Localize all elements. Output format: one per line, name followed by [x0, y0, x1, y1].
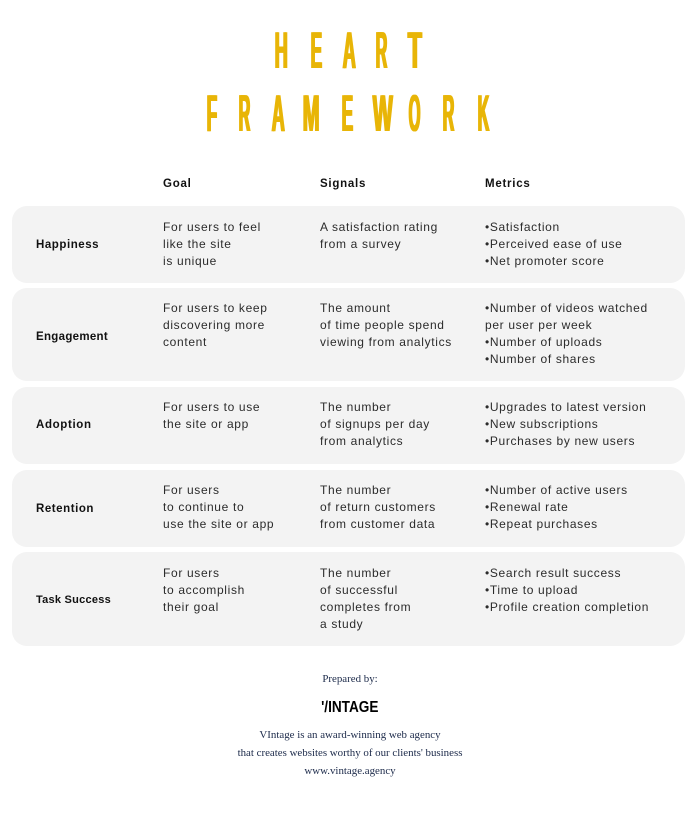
title: FRAMEWORK: R — [442, 85, 454, 143]
Engagement goal: content — [163, 335, 207, 349]
footer: agency description: that creates websites worthy of our clients' business — [238, 747, 462, 759]
Engagement goal — [163, 301, 268, 349]
title: HEART: A — [342, 22, 355, 80]
Task Success metrics: •Profile creation completion — [485, 600, 649, 614]
Engagement signals: The amount — [320, 301, 391, 315]
panel: Task Success row — [12, 552, 685, 646]
Task Success signals: The number — [320, 566, 391, 580]
Retention goal: For users — [163, 483, 220, 497]
footer: prepared by: Prepared by: — [322, 673, 378, 685]
Task Success signals: completes from — [320, 600, 411, 614]
Adoption goal — [163, 400, 260, 431]
panel: Happiness row — [12, 206, 685, 283]
Adoption metrics: •New subscriptions — [485, 417, 598, 431]
Task Success goal: their goal — [163, 600, 219, 614]
Happiness goal: like the site — [163, 237, 232, 251]
Happiness metrics: •Perceived ease of use — [485, 237, 622, 251]
Retention goal: to continue to — [163, 500, 244, 514]
panel: Retention row — [12, 470, 685, 547]
Task Success goal — [163, 566, 245, 614]
Task Success signals: a study — [320, 617, 363, 631]
Happiness goal — [163, 220, 261, 268]
Happiness signals: from a survey — [320, 237, 401, 251]
Retention metrics: •Number of active users — [485, 483, 628, 497]
Retention signals: from customer data — [320, 517, 435, 531]
title: FRAMEWORK: A — [271, 85, 284, 143]
Happiness metrics: •Satisfaction — [485, 220, 560, 234]
title: HEART: T — [407, 22, 421, 80]
panel: Adoption row — [12, 387, 685, 464]
title: FRAMEWORK: E — [341, 85, 352, 143]
Adoption metrics: •Upgrades to latest version — [485, 400, 646, 414]
row label: Engagement: Engagement — [36, 331, 108, 343]
Retention metrics: •Repeat purchases — [485, 517, 598, 531]
column heading: Metrics: Metrics — [485, 178, 531, 190]
Adoption goal: For users to use — [163, 400, 260, 414]
Engagement goal: discovering more — [163, 318, 265, 332]
Retention signals: of return customers — [320, 500, 436, 514]
Happiness metrics: •Net promoter score — [485, 254, 604, 268]
title: FRAMEWORK: K — [477, 85, 489, 143]
Adoption goal: the site or app — [163, 417, 249, 431]
column heading: Signals: Signals — [320, 178, 366, 190]
Happiness metrics — [485, 220, 622, 268]
footer: agency description: www.vintage.agency — [304, 765, 396, 777]
title: HEART — [274, 22, 422, 80]
Engagement signals — [320, 301, 452, 349]
title: HEART: E — [310, 22, 321, 80]
logo: VINTAGE: '/INTAGE — [321, 699, 379, 716]
Happiness signals — [320, 220, 438, 251]
row label: Retention: Retention — [36, 503, 94, 515]
title: HEART: R — [375, 22, 387, 80]
row label: Happiness: Happiness — [36, 239, 99, 251]
Task Success metrics — [485, 566, 649, 614]
Engagement metrics — [485, 301, 648, 366]
column heading: Goal: Goal — [163, 178, 192, 190]
title: FRAMEWORK: W — [372, 85, 392, 143]
Retention signals — [320, 483, 436, 531]
title: FRAMEWORK: R — [238, 85, 250, 143]
Engagement metrics: per user per week — [485, 318, 592, 332]
Engagement signals: of time people spend — [320, 318, 445, 332]
Adoption signals — [320, 400, 430, 448]
Retention signals: The number — [320, 483, 391, 497]
Happiness signals: A satisfaction rating — [320, 220, 438, 234]
Adoption metrics: •Purchases by new users — [485, 434, 635, 448]
panel: Engagement row — [12, 288, 685, 381]
Task Success goal: to accomplish — [163, 583, 245, 597]
Engagement metrics: •Number of shares — [485, 352, 596, 366]
footer: agency description — [238, 729, 462, 777]
title: FRAMEWORK: M — [302, 85, 319, 143]
title: FRAMEWORK: F — [206, 85, 216, 143]
Engagement signals: viewing from analytics — [320, 335, 452, 349]
title: HEART: H — [274, 22, 287, 80]
title: FRAMEWORK — [206, 85, 490, 143]
Happiness goal: For users to feel — [163, 220, 261, 234]
Task Success signals — [320, 566, 411, 631]
Task Success goal: For users — [163, 566, 220, 580]
Retention metrics: •Renewal rate — [485, 500, 568, 514]
Happiness goal: is unique — [163, 254, 217, 268]
Adoption signals: from analytics — [320, 434, 403, 448]
footer: agency description: VIntage is an award-winning web agency — [259, 729, 441, 741]
row label: Task Success: Task Success — [36, 594, 111, 606]
title: FRAMEWORK: O — [408, 85, 420, 143]
Task Success metrics: •Time to upload — [485, 583, 578, 597]
Retention metrics — [485, 483, 628, 531]
Engagement metrics: •Number of videos watched — [485, 301, 648, 315]
Task Success metrics: •Search result success — [485, 566, 621, 580]
Engagement goal: For users to keep — [163, 301, 268, 315]
Adoption metrics — [485, 400, 646, 448]
Retention goal — [163, 483, 274, 531]
Engagement metrics: •Number of uploads — [485, 335, 602, 349]
Task Success signals: of successful — [320, 583, 398, 597]
Retention goal: use the site or app — [163, 517, 274, 531]
Adoption signals: The number — [320, 400, 391, 414]
Adoption signals: of signups per day — [320, 417, 430, 431]
row label: Adoption: Adoption — [36, 419, 92, 431]
